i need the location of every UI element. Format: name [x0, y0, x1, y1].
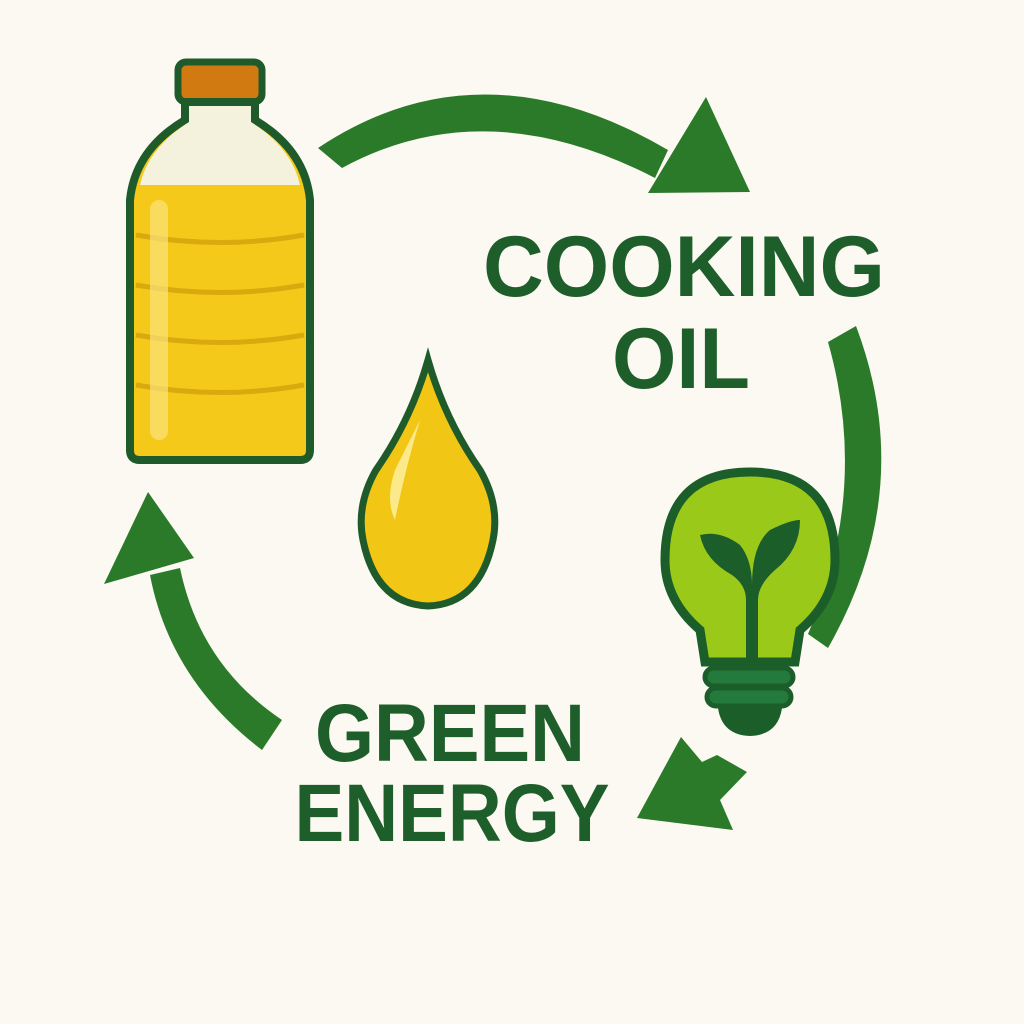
arrow: left	[104, 492, 282, 750]
arrow: top	[318, 94, 750, 193]
icon: oil drop	[361, 360, 495, 606]
heading: green energy	[294, 688, 610, 859]
heading: cooking oil: COOKING	[483, 219, 885, 315]
heading: cooking oil	[483, 219, 885, 407]
heading: green energy: ENERGY	[294, 768, 610, 859]
heading: cooking oil: OIL	[612, 311, 750, 407]
arrow: right	[808, 326, 881, 648]
arrow: bottom-right	[637, 737, 747, 830]
icon: oil bottle	[130, 62, 310, 460]
heading: green energy: GREEN	[315, 688, 585, 779]
icon: light bulb with sprout	[665, 472, 835, 736]
